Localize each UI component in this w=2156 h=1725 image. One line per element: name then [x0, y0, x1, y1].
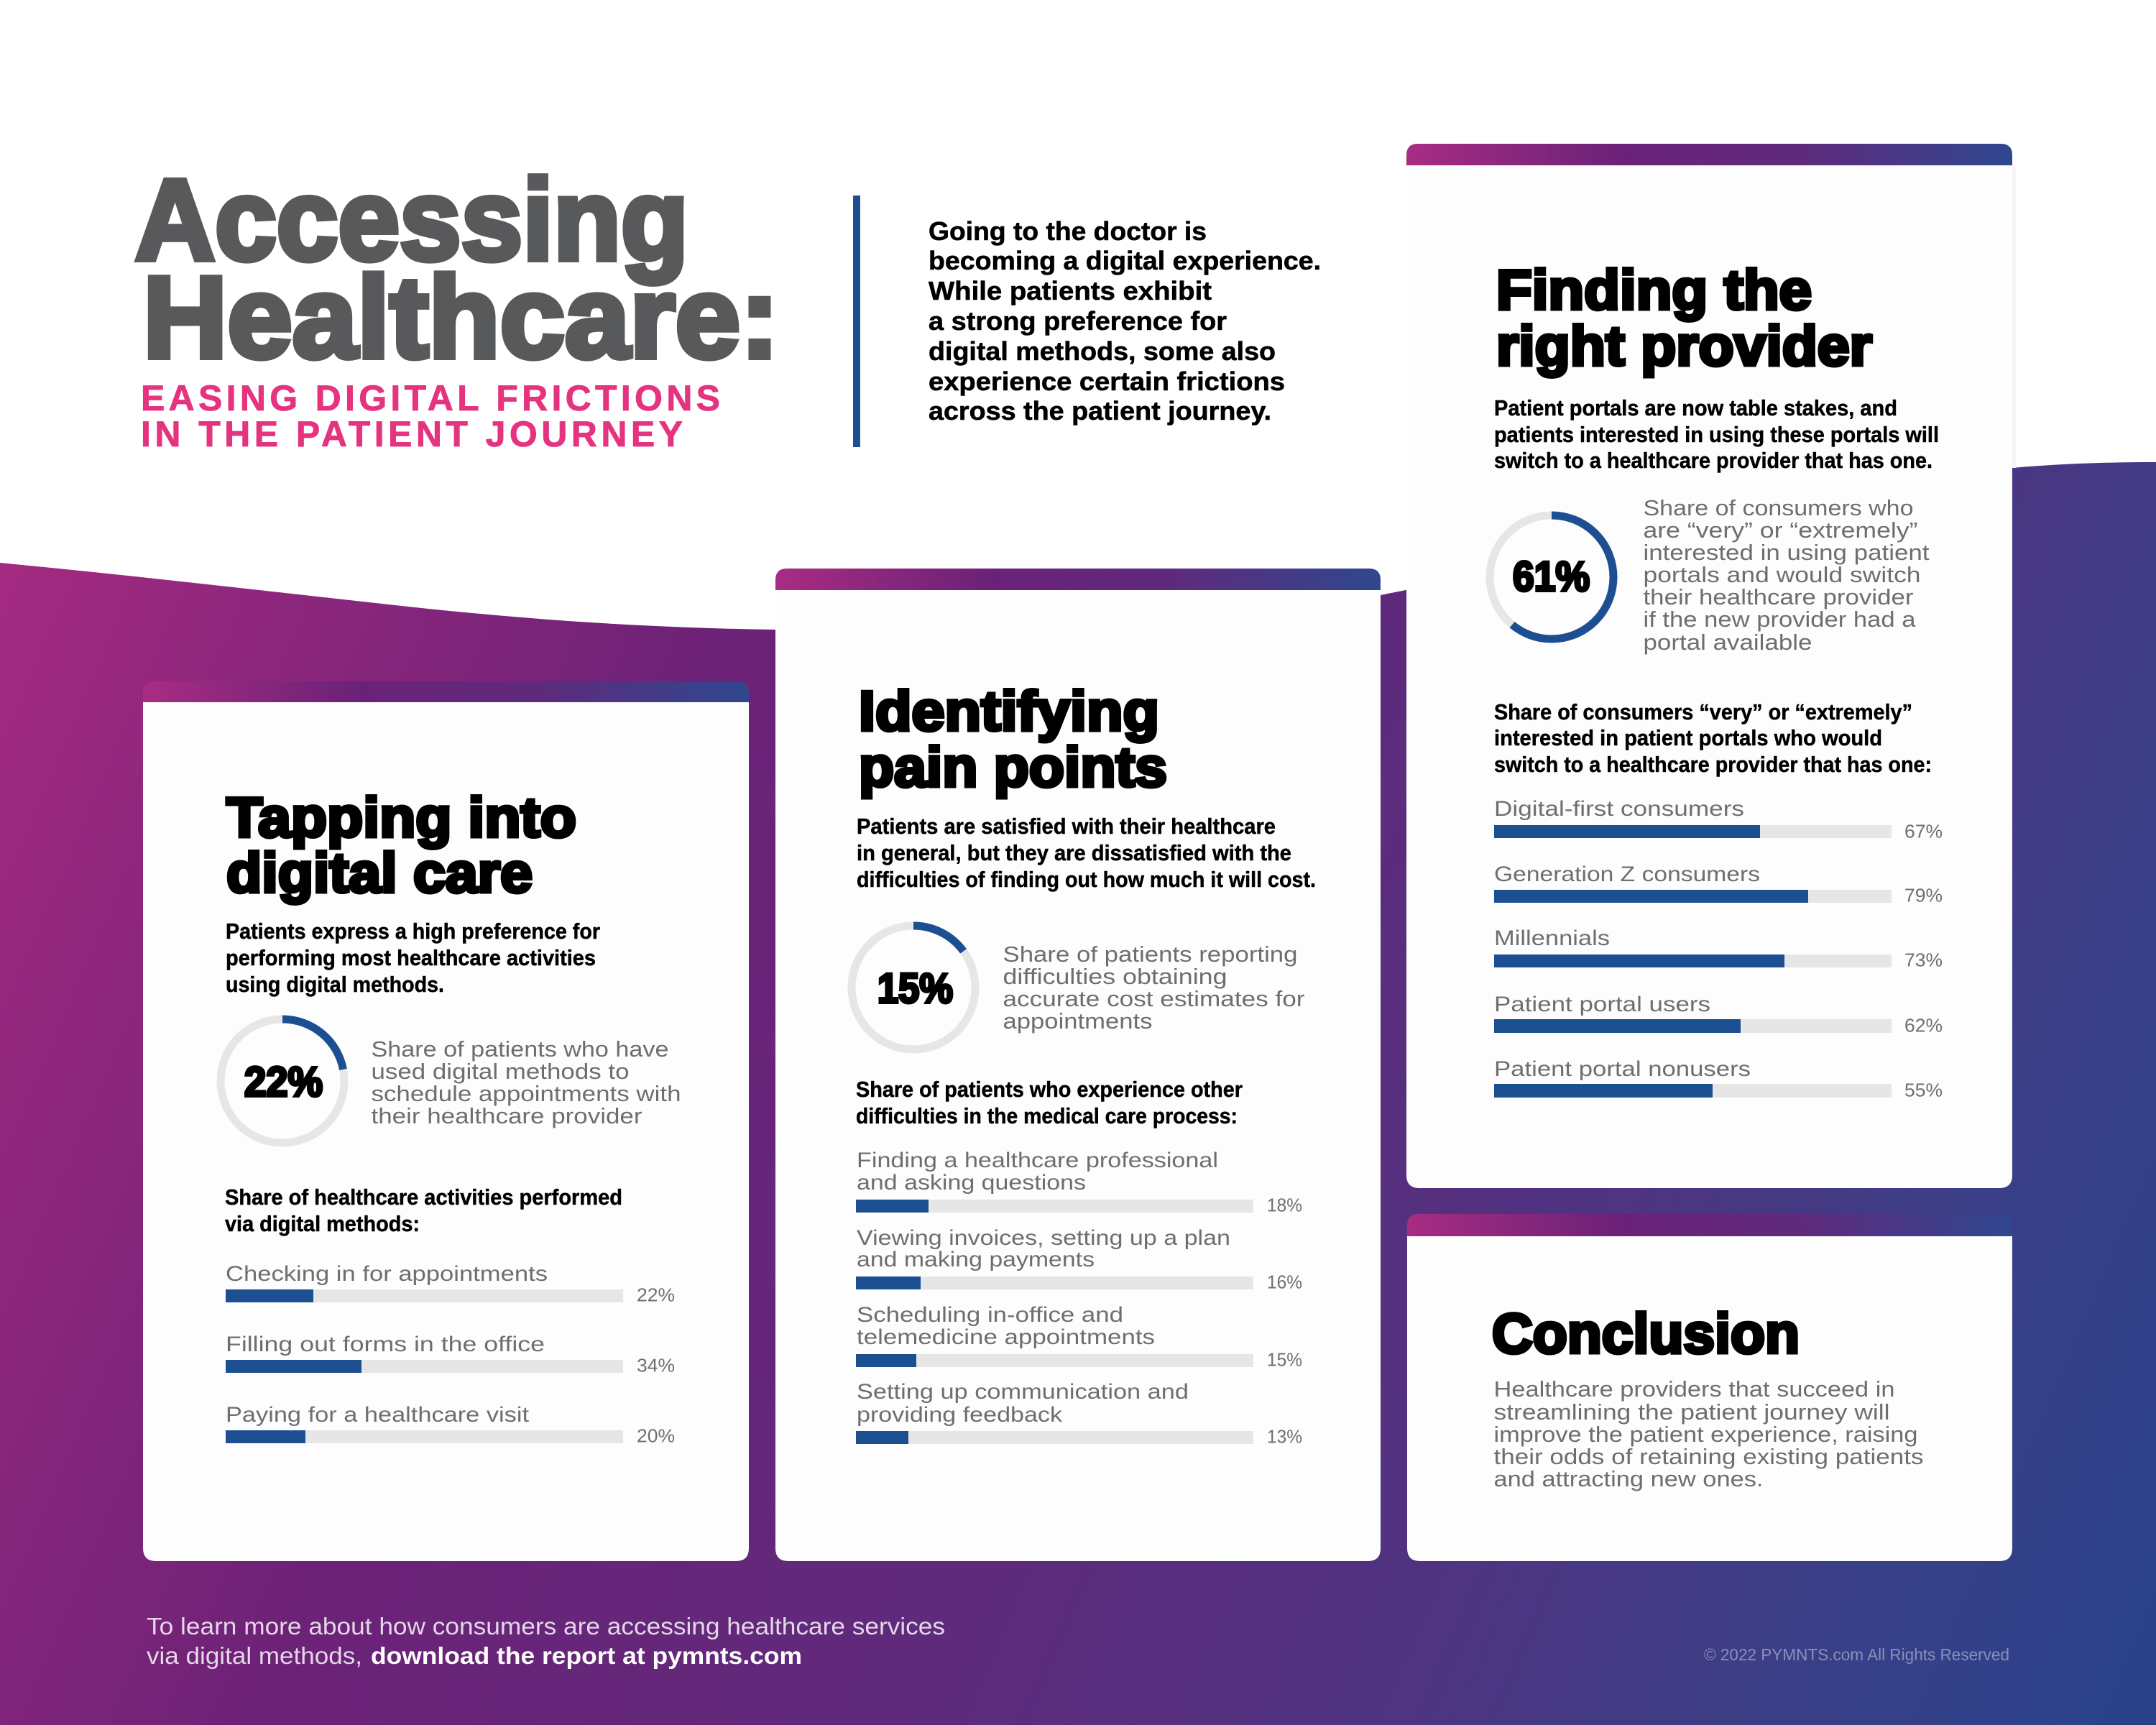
chart heading [1494, 699, 1932, 777]
heading: pain points [859, 735, 1167, 799]
bar: portal nonusers [1494, 1057, 1943, 1101]
bar chart: other difficulties [856, 1149, 1302, 1448]
bar: digital-first consumers: 67% [1904, 821, 1943, 842]
lead text: Patient portals are now table stakes, and [1494, 395, 1897, 420]
footer call to action [147, 1613, 945, 1669]
bar: portal nonusers: Patient portal nonusers [1494, 1057, 1751, 1081]
lead text [226, 919, 600, 997]
bar: communication: 13% [1267, 1426, 1302, 1448]
conclusion text [1493, 1376, 1923, 1491]
donut description [1003, 942, 1305, 1034]
chart heading: difficulties in the medical care process: [856, 1103, 1238, 1128]
bar: checking in [226, 1262, 675, 1305]
donut 22% [221, 1019, 344, 1143]
lead text: patients interested in using these portals will [1494, 422, 1939, 447]
bar: millennials [1494, 926, 1943, 970]
bar: generation z [1494, 862, 1943, 906]
lead text [857, 814, 1316, 892]
panel header bar [1406, 144, 2012, 165]
donut description: portals and would switch [1643, 562, 1920, 587]
lead text: using digital methods. [226, 972, 444, 997]
donut description: Share of consumers who [1643, 495, 1913, 520]
heading [226, 786, 576, 904]
panel: conclusion [1407, 1214, 2012, 1561]
bar: digital-first consumers [1494, 797, 1943, 842]
bar: paying for a visit: 20% [637, 1425, 675, 1446]
bar: finding a professional: Finding a healthcare professional [857, 1149, 1218, 1172]
donut description: Share of patients reporting [1003, 942, 1298, 967]
footer call to action: To learn more about how consumers are accessing healthcare services [147, 1613, 945, 1639]
donut description: portal available [1643, 630, 1812, 655]
bar: scheduling: 15% [1267, 1348, 1302, 1370]
intro text: While patients exhibit [929, 276, 1212, 305]
bar: viewing invoices: Viewing invoices, setting up a plan [857, 1226, 1230, 1250]
lead text: switch to a healthcare provider that has one. [1494, 448, 1932, 473]
donut description: their healthcare provider [371, 1103, 642, 1128]
donut description: are “very” or “extremely” [1643, 518, 1917, 543]
heading: Finding the [1496, 258, 1812, 321]
bar: viewing invoices: and making payments [857, 1248, 1095, 1271]
bar: millennials: Millennials [1494, 926, 1610, 950]
lead text [1494, 395, 1939, 473]
heading: Conclusion [1492, 1302, 1800, 1365]
donut description: appointments [1003, 1008, 1153, 1034]
lead text: performing most healthcare activities [226, 945, 596, 970]
bar: checking in: Checking in for appointments [226, 1262, 548, 1286]
chart heading: interested in patient portals who would [1494, 725, 1882, 750]
bar: scheduling [856, 1303, 1302, 1370]
copyright: © 2022 PYMNTS.com All Rights Reserved [1704, 1645, 2009, 1664]
donut description: schedule appointments with [371, 1081, 681, 1106]
intro text: across the patient journey. [929, 396, 1271, 426]
footer call to action: via digital methods, [147, 1642, 362, 1669]
bar: finding a professional: and asking questions [857, 1171, 1086, 1195]
chart heading [856, 1077, 1243, 1128]
title [135, 155, 779, 382]
bar: filling out forms: Filling out forms in the office [226, 1333, 545, 1356]
donut description [1643, 495, 1930, 655]
donut description: accurate cost estimates for [1003, 986, 1305, 1011]
panel: finding the right provider [1406, 144, 2016, 1188]
donut description: interested in using patient [1643, 540, 1930, 565]
heading [1496, 258, 1872, 377]
bar: checking in: 22% [637, 1284, 675, 1305]
chart heading [225, 1184, 622, 1236]
donut description [371, 1036, 681, 1128]
bar: paying for a visit: Paying for a healthcare visit [226, 1403, 530, 1427]
bar: finding a professional: 18% [1267, 1195, 1302, 1216]
bar: communication: providing feedback [857, 1403, 1063, 1427]
donut 22%: 22% [244, 1059, 323, 1105]
donut 15% [852, 926, 975, 1049]
heading: Identifying [859, 679, 1159, 742]
heading: right provider [1496, 314, 1872, 377]
lead text: difficulties of finding out how much it will cost. [857, 867, 1316, 892]
panel header bar [1407, 1214, 2012, 1236]
conclusion text: streamlining the patient journey will [1493, 1399, 1890, 1425]
vertical divider [853, 196, 860, 447]
panel: identifying pain points [775, 569, 1381, 1561]
donut 61%: 61% [1513, 553, 1590, 600]
bar: portal nonusers: 55% [1904, 1080, 1943, 1101]
donut description: difficulties obtaining [1003, 964, 1227, 989]
bar: viewing invoices: 16% [1267, 1271, 1302, 1292]
bar: scheduling: telemedicine appointments [857, 1325, 1155, 1349]
footer call to action: download the report at pymnts.com [371, 1642, 802, 1669]
lead text: in general, but they are dissatisfied with the [857, 840, 1291, 865]
lead text: Patients express a high preference for [226, 919, 600, 944]
bar: scheduling: Scheduling in-office and [857, 1303, 1123, 1327]
chart heading: Share of healthcare activities performed [225, 1184, 622, 1210]
intro text: experience certain frictions [929, 367, 1285, 396]
panel: tapping into digital care [143, 681, 749, 1561]
bar: generation z: Generation Z consumers [1494, 862, 1760, 886]
bar chart: consumer segments [1494, 797, 1943, 1101]
donut description: used digital methods to [371, 1059, 630, 1084]
heading: digital care [226, 841, 533, 904]
background wave [0, 462, 2156, 1725]
bar: communication: Setting up communication and [857, 1380, 1189, 1404]
donut description: their healthcare provider [1643, 584, 1913, 610]
chart heading: via digital methods: [225, 1211, 420, 1236]
conclusion text: Healthcare providers that succeed in [1493, 1376, 1894, 1402]
title: Accessing [135, 155, 688, 284]
bar: filling out forms [226, 1333, 675, 1376]
chart heading: switch to a healthcare provider that has one: [1494, 752, 1932, 777]
chart heading: Share of consumers “very” or “extremely” [1494, 699, 1912, 724]
intro text [929, 216, 1321, 426]
heading: Tapping into [226, 786, 576, 849]
bar: paying for a visit [226, 1403, 675, 1446]
bar: portal users [1494, 993, 1943, 1036]
intro text: Going to the doctor is [929, 216, 1207, 246]
chart heading: Share of patients who experience other [856, 1077, 1243, 1102]
bar: viewing invoices [856, 1226, 1302, 1292]
panel header bar [143, 681, 749, 702]
bar: filling out forms: 34% [637, 1354, 675, 1376]
bar: portal users: 62% [1904, 1015, 1943, 1036]
lead text: Patients are satisfied with their healthcare [857, 814, 1276, 839]
subtitle [141, 378, 720, 454]
donut description: Share of patients who have [371, 1036, 668, 1062]
bar: communication [856, 1380, 1302, 1448]
intro text: digital methods, some also [929, 336, 1276, 366]
bar: finding a professional [856, 1149, 1302, 1216]
heading [859, 679, 1167, 799]
panel header bar [775, 569, 1381, 590]
conclusion text: improve the patient experience, raising [1493, 1422, 1917, 1447]
title: Healthcare: [143, 253, 779, 382]
bar: millennials: 73% [1904, 949, 1943, 970]
intro text: a strong preference for [929, 306, 1227, 336]
subtitle: EASING DIGITAL FRICTIONS [141, 378, 720, 418]
donut 61% [1490, 515, 1613, 639]
donut description: if the new provider had a [1643, 607, 1916, 632]
bar chart: digital activities [226, 1262, 675, 1446]
bar: generation z: 79% [1904, 884, 1943, 906]
conclusion text: their odds of retaining existing patients [1493, 1444, 1923, 1469]
intro text: becoming a digital experience. [929, 246, 1321, 275]
bar: digital-first consumers: Digital-first consumers [1494, 797, 1744, 821]
conclusion text: and attracting new ones. [1493, 1466, 1764, 1491]
bar: portal users: Patient portal users [1494, 993, 1710, 1016]
subtitle: IN THE PATIENT JOURNEY [141, 414, 683, 454]
donut 15%: 15% [877, 965, 953, 1012]
